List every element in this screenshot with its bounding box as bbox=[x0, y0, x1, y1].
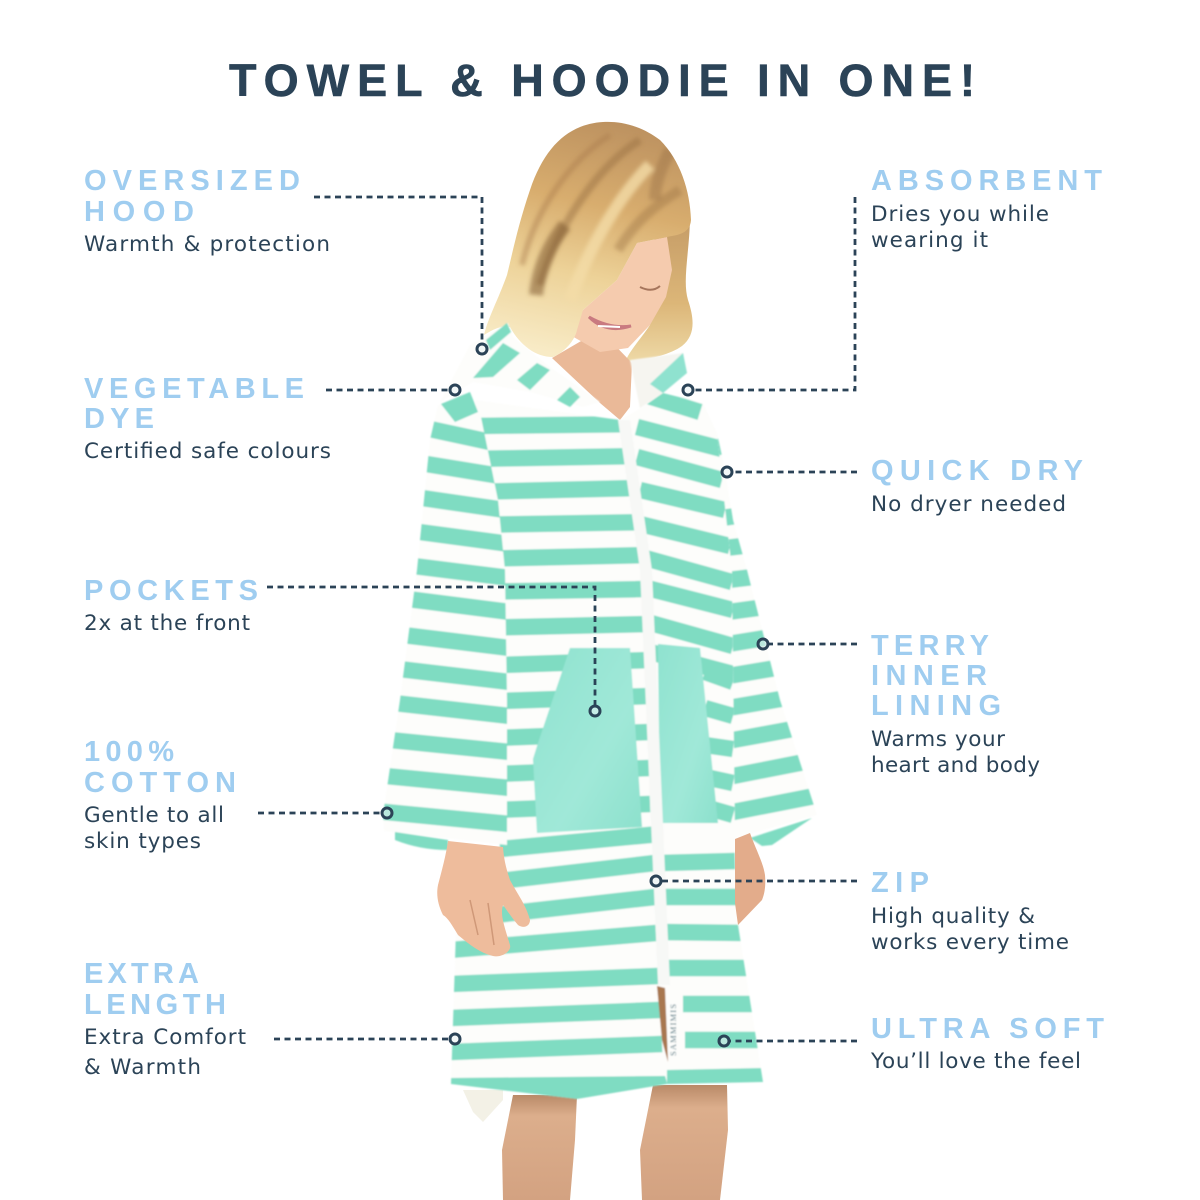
left sleeve bbox=[382, 404, 508, 846]
title: TOWEL & HOODIE IN ONE! bbox=[229, 55, 975, 106]
right sleeve bbox=[717, 438, 814, 821]
pockets bbox=[533, 644, 718, 833]
callout: quick dry: No dryer needed bbox=[871, 492, 1066, 517]
back hair bbox=[625, 215, 693, 362]
callout: oversized hood: Warmth & protection bbox=[84, 232, 330, 257]
legs bbox=[502, 1085, 728, 1200]
callout: zip: works every time bbox=[871, 930, 1069, 955]
hood bbox=[440, 323, 687, 422]
callout: 100% cotton: skin types bbox=[84, 829, 201, 854]
callout: extra length bbox=[84, 958, 460, 1080]
callout: absorbent: Dries you while bbox=[871, 202, 1049, 227]
front slit bbox=[657, 986, 668, 1062]
hair bbox=[484, 122, 691, 357]
towel inner flap bbox=[463, 1090, 503, 1122]
callout: terry inner lining bbox=[758, 630, 1040, 778]
brand label: SAMMIMIS bbox=[668, 1004, 678, 1056]
callout: ultra soft: You’ll love the feel bbox=[870, 1049, 1081, 1074]
callout: absorbent: wearing it bbox=[871, 228, 988, 253]
callout: zip bbox=[651, 867, 1069, 955]
callout: terry inner lining: LINING bbox=[871, 690, 1001, 722]
callout: 100% cotton: 100% bbox=[84, 736, 174, 768]
callout: ultra soft: ULTRA SOFT bbox=[871, 1013, 1104, 1045]
callout: vegetable dye: VEGETABLE bbox=[84, 373, 304, 405]
callout: 100% cotton bbox=[84, 736, 392, 854]
callout: pockets bbox=[84, 575, 600, 716]
callout: extra length: LENGTH bbox=[84, 989, 226, 1021]
callout: ultra soft bbox=[719, 1013, 1104, 1074]
underside of left cuff bbox=[395, 832, 448, 850]
callout: 100% cotton: COTTON bbox=[84, 767, 236, 799]
callout: pockets: 2x at the front bbox=[84, 611, 250, 636]
robe left front panel bbox=[450, 403, 668, 1100]
callout: extra length: & Warmth bbox=[84, 1055, 201, 1080]
callout: oversized hood bbox=[84, 165, 487, 354]
zip bbox=[618, 420, 670, 985]
callout: 100% cotton: Gentle to all bbox=[84, 803, 224, 828]
callout: quick dry: QUICK DRY bbox=[871, 455, 1083, 487]
callout: absorbent bbox=[683, 165, 1102, 395]
callout: terry inner lining: heart and body bbox=[871, 753, 1040, 778]
callout: quick dry bbox=[722, 455, 1083, 517]
callout: terry inner lining: INNER bbox=[871, 660, 987, 692]
underside of right cuff bbox=[750, 818, 812, 846]
robe right front panel bbox=[620, 390, 770, 1110]
callout: terry inner lining: Warms your bbox=[871, 727, 1005, 752]
callout: extra length: EXTRA bbox=[84, 958, 199, 990]
callout: oversized hood: HOOD bbox=[84, 196, 194, 228]
callout: pockets: POCKETS bbox=[84, 575, 258, 607]
callout: oversized hood: OVERSIZED bbox=[84, 165, 300, 197]
callout: vegetable dye: DYE bbox=[84, 403, 154, 435]
callout: vegetable dye: Certified safe colours bbox=[84, 439, 331, 464]
callout: terry inner lining: TERRY bbox=[871, 630, 989, 662]
neck and face bbox=[552, 237, 672, 420]
robe body bbox=[375, 323, 830, 1110]
callout: zip: ZIP bbox=[871, 867, 929, 899]
illustration: girl wearing striped hooded towel bbox=[375, 122, 830, 1200]
callout: extra length: Extra Comfort bbox=[84, 1025, 246, 1050]
brand label bbox=[668, 990, 682, 1066]
callout: absorbent: ABSORBENT bbox=[871, 165, 1102, 197]
callout: vegetable dye bbox=[84, 373, 460, 464]
hands bbox=[437, 833, 765, 956]
callout: zip: High quality & bbox=[871, 904, 1035, 929]
